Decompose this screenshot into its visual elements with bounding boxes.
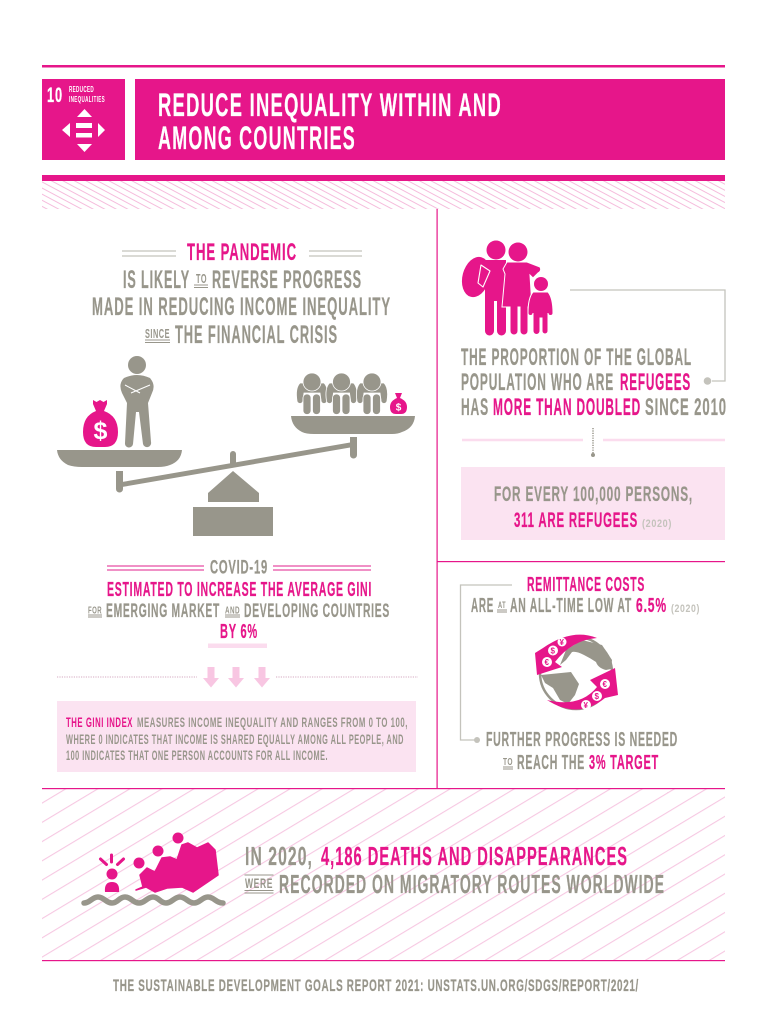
text: refugee proportion <box>461 344 727 421</box>
icon: big money bag <box>83 400 118 447</box>
text: income inequality statement: SINCE <box>145 326 170 341</box>
text: covid-19 gini estimate: DEVELOPING COUNTRIES <box>244 601 390 622</box>
callout: gini index definition: 100 INDICATES THAT ONE PERSON ACCOUNTS FOR ALL INCOME. <box>66 747 328 763</box>
father <box>485 260 506 336</box>
text: deaths and disappearances: WERE <box>245 875 273 891</box>
text: further progress: TO <box>503 757 513 768</box>
icon: globe with money arrows: ¥ <box>583 701 589 710</box>
title banner: AMONG COUNTRIES <box>158 120 356 156</box>
header <box>42 65 725 209</box>
icon: SDG 10 badge: 10 <box>47 84 63 107</box>
callout: refugees per 100,000: 311 ARE REFUGEES <box>514 509 638 532</box>
text: remittance costs: ARE <box>471 595 494 617</box>
icon: small money bag <box>390 393 407 414</box>
icon: down arrows <box>203 667 270 688</box>
seated people <box>296 373 388 414</box>
icon: globe with money arrows: ¥ <box>559 638 565 647</box>
icon: refugee family <box>458 240 553 336</box>
text: refugee proportion: REFUGEES <box>620 369 691 396</box>
callout: gini index definition: MEASURES INCOME INEQUALITY AND RANGES FROM 0 TO 100, <box>137 714 408 730</box>
text: further progress <box>486 729 678 774</box>
right pan <box>291 416 415 434</box>
text: income inequality statement: TO <box>196 271 207 286</box>
text: refugee proportion: POPULATION WHO ARE <box>461 369 614 396</box>
icon: seesaw <box>57 356 415 536</box>
text: covid-19 gini estimate: AND <box>225 606 240 616</box>
icon: capsized boat <box>84 832 223 903</box>
fulcrum <box>193 471 273 536</box>
text: remittance costs: 6.5% <box>636 595 667 617</box>
panel: remittance costs <box>460 574 700 774</box>
connector line <box>570 290 725 381</box>
callout: refugees per 100,000: (2020) <box>642 518 672 530</box>
icon: SDG 10 badge <box>42 79 125 160</box>
text: covid-19 gini estimate: BY 6% <box>220 621 258 643</box>
left pan <box>57 450 182 467</box>
text: deaths and disappearances: IN 2020, <box>245 841 313 871</box>
text: income inequality statement: THE FINANCIAL CRISIS <box>175 321 338 349</box>
man <box>120 356 154 448</box>
panel: refugees <box>458 240 727 540</box>
text: income inequality statement: IS LIKELY <box>123 266 190 294</box>
callout: refugees per 100,000 <box>461 467 725 540</box>
text: further progress: REACH THE <box>517 752 585 774</box>
text: further progress: 3% TARGET <box>589 752 659 774</box>
callout: gini index definition <box>57 701 416 772</box>
text: remittance costs: AN ALL-TIME LOW AT <box>510 595 632 617</box>
mother <box>502 262 541 335</box>
text: remittance costs: AT <box>498 600 506 610</box>
panel: migratory routes <box>42 788 725 961</box>
heading: the pandemic <box>122 239 362 266</box>
heading: the pandemic: THE PANDEMIC <box>187 239 297 266</box>
icon: big money bag: $ <box>94 417 108 445</box>
child <box>528 292 553 334</box>
text: covid-19 gini estimate: COVID-19 <box>210 558 268 578</box>
callout: gini index definition: THE GINI INDEX <box>66 714 133 730</box>
icon: SDG 10 badge: REDUCED <box>69 85 94 94</box>
title banner: REDUCE INEQUALITY WITHIN AND <box>158 87 502 123</box>
text: income inequality statement: MADE IN REDUCING INCOME INEQUALITY <box>92 293 391 321</box>
icon: globe with money arrows: $ <box>550 646 556 656</box>
panel: pandemic <box>57 239 418 772</box>
icon: globe with money arrows: € <box>602 680 608 689</box>
text: income inequality statement: REVERSE PROGRESS <box>212 266 362 294</box>
text: deaths and disappearances <box>244 841 665 899</box>
text: covid-19 gini estimate: EMERGING MARKET <box>106 601 220 622</box>
callout: gini index definition: WHERE 0 INDICATES THAT INCOME IS SHARED EQUALLY AMONG ALL PEOPLE, AND <box>66 731 404 747</box>
text: remittance costs: REMITTANCE COSTS <box>527 574 645 596</box>
beam <box>122 442 353 487</box>
title banner <box>135 79 725 160</box>
icon: globe with money arrows: $ <box>594 692 600 701</box>
icon: small money bag: $ <box>396 402 402 414</box>
icon: globe with money arrows <box>535 635 618 710</box>
text: remittance costs <box>471 574 700 617</box>
text: covid-19 gini estimate: ESTIMATED TO INCREASE THE AVERAGE GINI <box>107 579 372 601</box>
text: refugee proportion: HAS <box>461 394 489 421</box>
text: covid-19 gini estimate: FOR <box>88 606 102 616</box>
icon: SDG 10 badge: INEQUALITIES <box>69 95 105 104</box>
text: remittance costs: (2020) <box>671 603 700 615</box>
text: income inequality statement <box>92 266 391 349</box>
icon: globe with money arrows: € <box>544 658 550 667</box>
text: covid-19 gini estimate <box>88 558 390 648</box>
